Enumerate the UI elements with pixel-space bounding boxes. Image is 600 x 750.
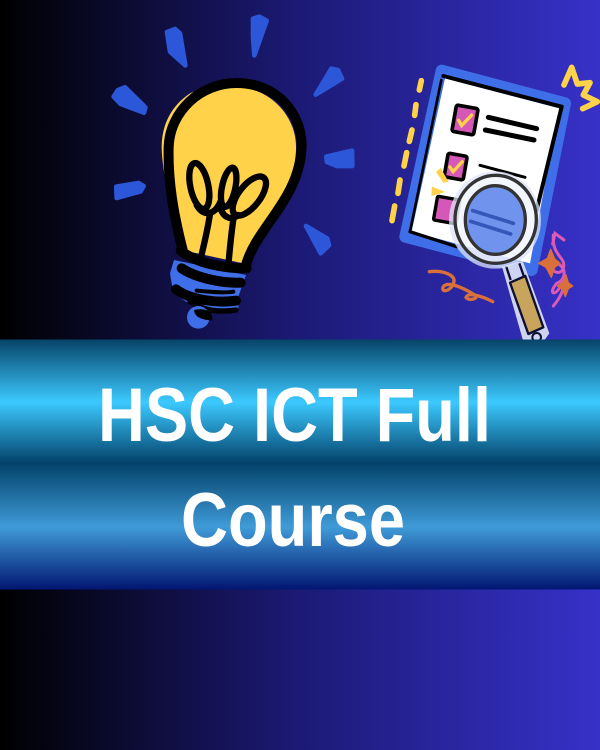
yellow crown doodle (564, 67, 597, 109)
title line 1: HSC ICT Full (98, 373, 491, 458)
orange sparkles (539, 249, 573, 297)
orange squiggle (429, 271, 493, 302)
icon: checklist with magnifying glass (392, 67, 597, 342)
text lines 1 (485, 117, 537, 140)
magnifier lens (449, 171, 541, 269)
text line 2 (480, 165, 525, 177)
yellow dashes (392, 81, 421, 221)
document edges (410, 76, 562, 247)
bulb outline (169, 83, 302, 265)
document page (412, 78, 559, 263)
bulb tip (187, 306, 210, 329)
title (98, 373, 491, 563)
document blue backing (405, 71, 565, 270)
icon: light bulb with rays (114, 17, 352, 329)
checkbox 2 (444, 153, 467, 180)
magnifier handle (502, 261, 549, 342)
checkbox 1 (452, 105, 478, 135)
icon: light rays (114, 17, 352, 253)
lens magnified lines (471, 211, 513, 234)
title band (0, 340, 600, 590)
title line 2: Course (181, 478, 405, 563)
filament (186, 161, 272, 262)
bulb screw base (170, 260, 246, 308)
yellow accents (436, 168, 449, 183)
bulb glass (162, 87, 296, 263)
pink arrow doodle (551, 235, 564, 306)
checkbox 3 (433, 196, 460, 224)
